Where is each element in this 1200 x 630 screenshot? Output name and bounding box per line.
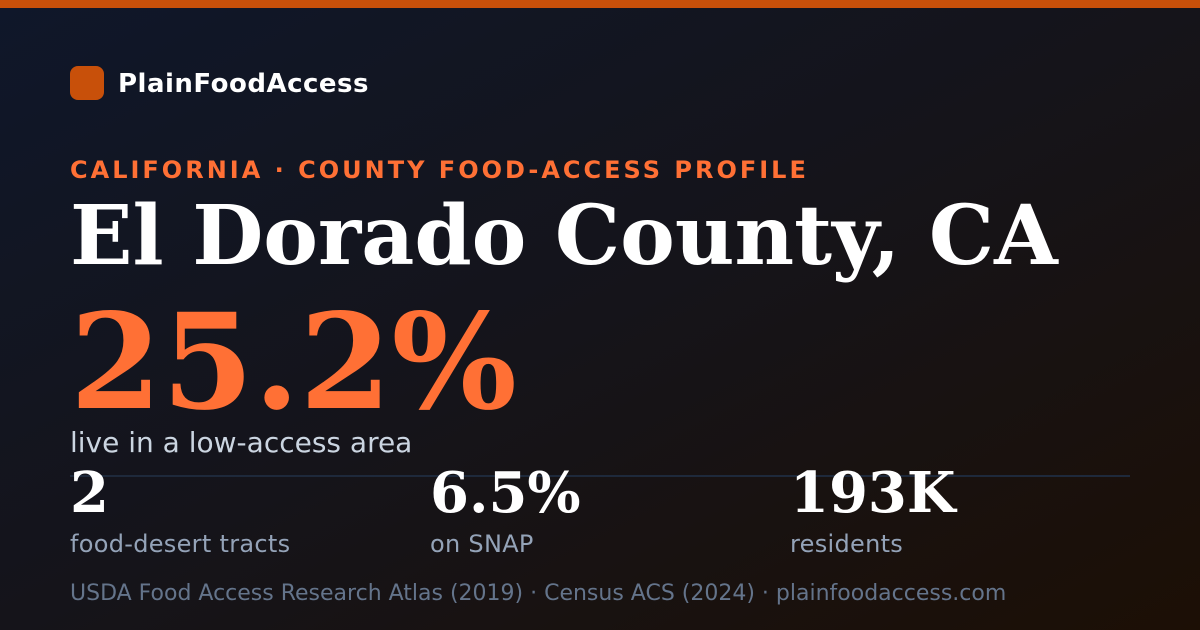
stat value: 2 bbox=[70, 460, 109, 526]
stat: on SNAP bbox=[430, 460, 581, 558]
eyebrow heading: CALIFORNIA · COUNTY FOOD-ACCESS PROFILE bbox=[70, 156, 809, 184]
stat: residents bbox=[790, 460, 958, 558]
stat: food-desert tracts bbox=[70, 460, 290, 558]
headline stat label: live in a low-access area bbox=[70, 426, 412, 459]
brand icon bbox=[70, 66, 104, 100]
stat label: on SNAP bbox=[430, 530, 534, 558]
stat value: 193K bbox=[790, 460, 956, 526]
stat label: food-desert tracts bbox=[70, 530, 290, 558]
top accent bar bbox=[0, 0, 1200, 8]
stat label: residents bbox=[790, 530, 903, 558]
title: El Dorado County, CA bbox=[70, 188, 1058, 284]
headline stat: 25.2% bbox=[70, 285, 517, 440]
stat value: 6.5% bbox=[430, 460, 581, 526]
divider bbox=[70, 475, 1130, 477]
brand name: PlainFoodAccess bbox=[118, 69, 369, 99]
footer sources: USDA Food Access Research Atlas (2019) · Census ACS (2024) · plainfoodaccess.com bbox=[70, 581, 1006, 606]
